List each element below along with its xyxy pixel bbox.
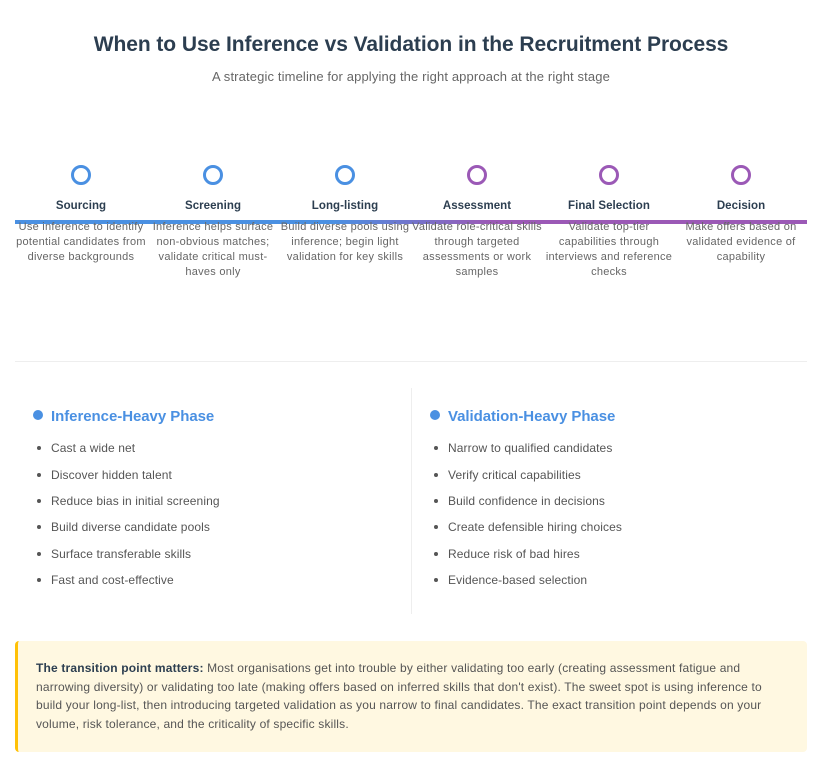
heading: Inference-Heavy Phase: Inference-Heavy Phase <box>51 408 214 425</box>
list: inference points: Fast and cost-effective <box>51 573 174 587</box>
heading: Validation-Heavy Phase: Validation-Heavy Phase <box>448 408 615 425</box>
list: inference points: Reduce bias in initial screening <box>51 494 220 508</box>
description: Long-listing: validation for key skills <box>287 251 403 263</box>
icon: validation dot <box>430 410 440 420</box>
stage: Assessment <box>412 165 542 278</box>
stage: Sourcing <box>16 165 146 263</box>
description: Screening: validate critical must- <box>159 251 267 263</box>
list: validation points: Build confidence in decisions <box>448 494 605 508</box>
marker: Sourcing <box>71 165 91 185</box>
callout: transition point: narrowing diversity) or validating too late (making offers based on inferred skills that don't exist). The sweet spot is using inference to <box>36 680 762 694</box>
list: inference points: Surface transferable skills <box>51 547 191 561</box>
list: inference points: Cast a wide net <box>51 441 135 455</box>
callout: transition point: build your long-list, then introducing targeted validation as you narrow to final candidates. The exact transition point depends on your <box>36 698 761 712</box>
description: Assessment: through targeted <box>434 236 520 248</box>
list: inference points <box>37 441 220 587</box>
marker: Assessment <box>467 165 487 185</box>
stage: Final Selection <box>546 165 672 278</box>
callout: transition point: volume, risk tolerance, and the criticality of specific skills. <box>36 717 349 731</box>
description: Final Selection <box>546 221 672 278</box>
description: Final Selection: capabilities through <box>559 236 659 248</box>
list: validation points: Reduce risk of bad hires <box>448 547 580 561</box>
list: inference points: Build diverse candidate pools <box>51 520 210 534</box>
description: Sourcing <box>16 221 146 263</box>
description: Screening <box>153 221 273 278</box>
label: Assessment: Assessment <box>443 200 511 212</box>
label: Sourcing: Sourcing <box>56 200 106 212</box>
stage: Decision <box>686 165 796 263</box>
marker: Decision <box>731 165 751 185</box>
description: Final Selection: checks <box>591 266 627 278</box>
description: Long-listing <box>281 221 409 263</box>
description: Final Selection: Validate top-tier <box>569 221 649 233</box>
marker: Long-listing <box>335 165 355 185</box>
label: Long-listing: Long-listing <box>312 200 378 212</box>
panel: Inference-Heavy Phase <box>33 408 220 587</box>
description: Decision <box>686 221 796 263</box>
stage: Long-listing <box>281 165 409 263</box>
icon: inference dot <box>33 410 43 420</box>
label: Decision: Decision <box>717 200 765 212</box>
description: Screening: non-obvious matches; <box>156 236 270 248</box>
panel: Validation-Heavy Phase <box>430 408 622 587</box>
marker: Screening <box>203 165 223 185</box>
list: validation points <box>434 441 622 587</box>
description: Assessment: assessments or work <box>423 251 531 263</box>
list: validation points: Create defensible hiring choices <box>448 520 622 534</box>
list: validation points: Verify critical capabilities <box>448 468 581 482</box>
list: inference points: Discover hidden talent <box>51 468 172 482</box>
description: Assessment: Validate role-critical skills <box>412 221 542 233</box>
description: Decision: Make offers based on <box>686 221 796 233</box>
description: Long-listing: Build diverse pools using <box>281 221 409 233</box>
timeline bar <box>15 220 807 224</box>
label: Screening: Screening <box>185 200 241 212</box>
callout: transition point <box>15 641 807 752</box>
marker: Final Selection <box>599 165 619 185</box>
description: Screening: Inference helps surface <box>153 221 273 233</box>
list: validation points: Evidence-based selection <box>448 573 587 587</box>
description: Sourcing: diverse backgrounds <box>28 251 134 263</box>
description: Screening: haves only <box>185 266 241 278</box>
description: Assessment <box>412 221 542 278</box>
label: Final Selection: Final Selection <box>568 200 650 212</box>
callout: transition point: The transition point matters: Most organisations get into trouble by either validating too early (creating assessment fatigue and <box>36 661 740 675</box>
stage: Screening <box>153 165 273 278</box>
title: When to Use Inference vs Validation in the Recruitment Process <box>94 33 728 56</box>
description: Assessment: samples <box>456 266 498 278</box>
description: Final Selection: interviews and reference <box>546 251 672 263</box>
description: Decision: validated evidence of <box>686 236 796 248</box>
description: Sourcing: potential candidates from <box>16 236 146 248</box>
description: Sourcing: Use inference to identify <box>19 221 143 233</box>
list: validation points: Narrow to qualified candidates <box>448 441 612 455</box>
subtitle: A strategic timeline for applying the right approach at the right stage <box>212 69 610 84</box>
description: Long-listing: inference; begin light <box>291 236 399 248</box>
description: Decision: capability <box>717 251 765 263</box>
